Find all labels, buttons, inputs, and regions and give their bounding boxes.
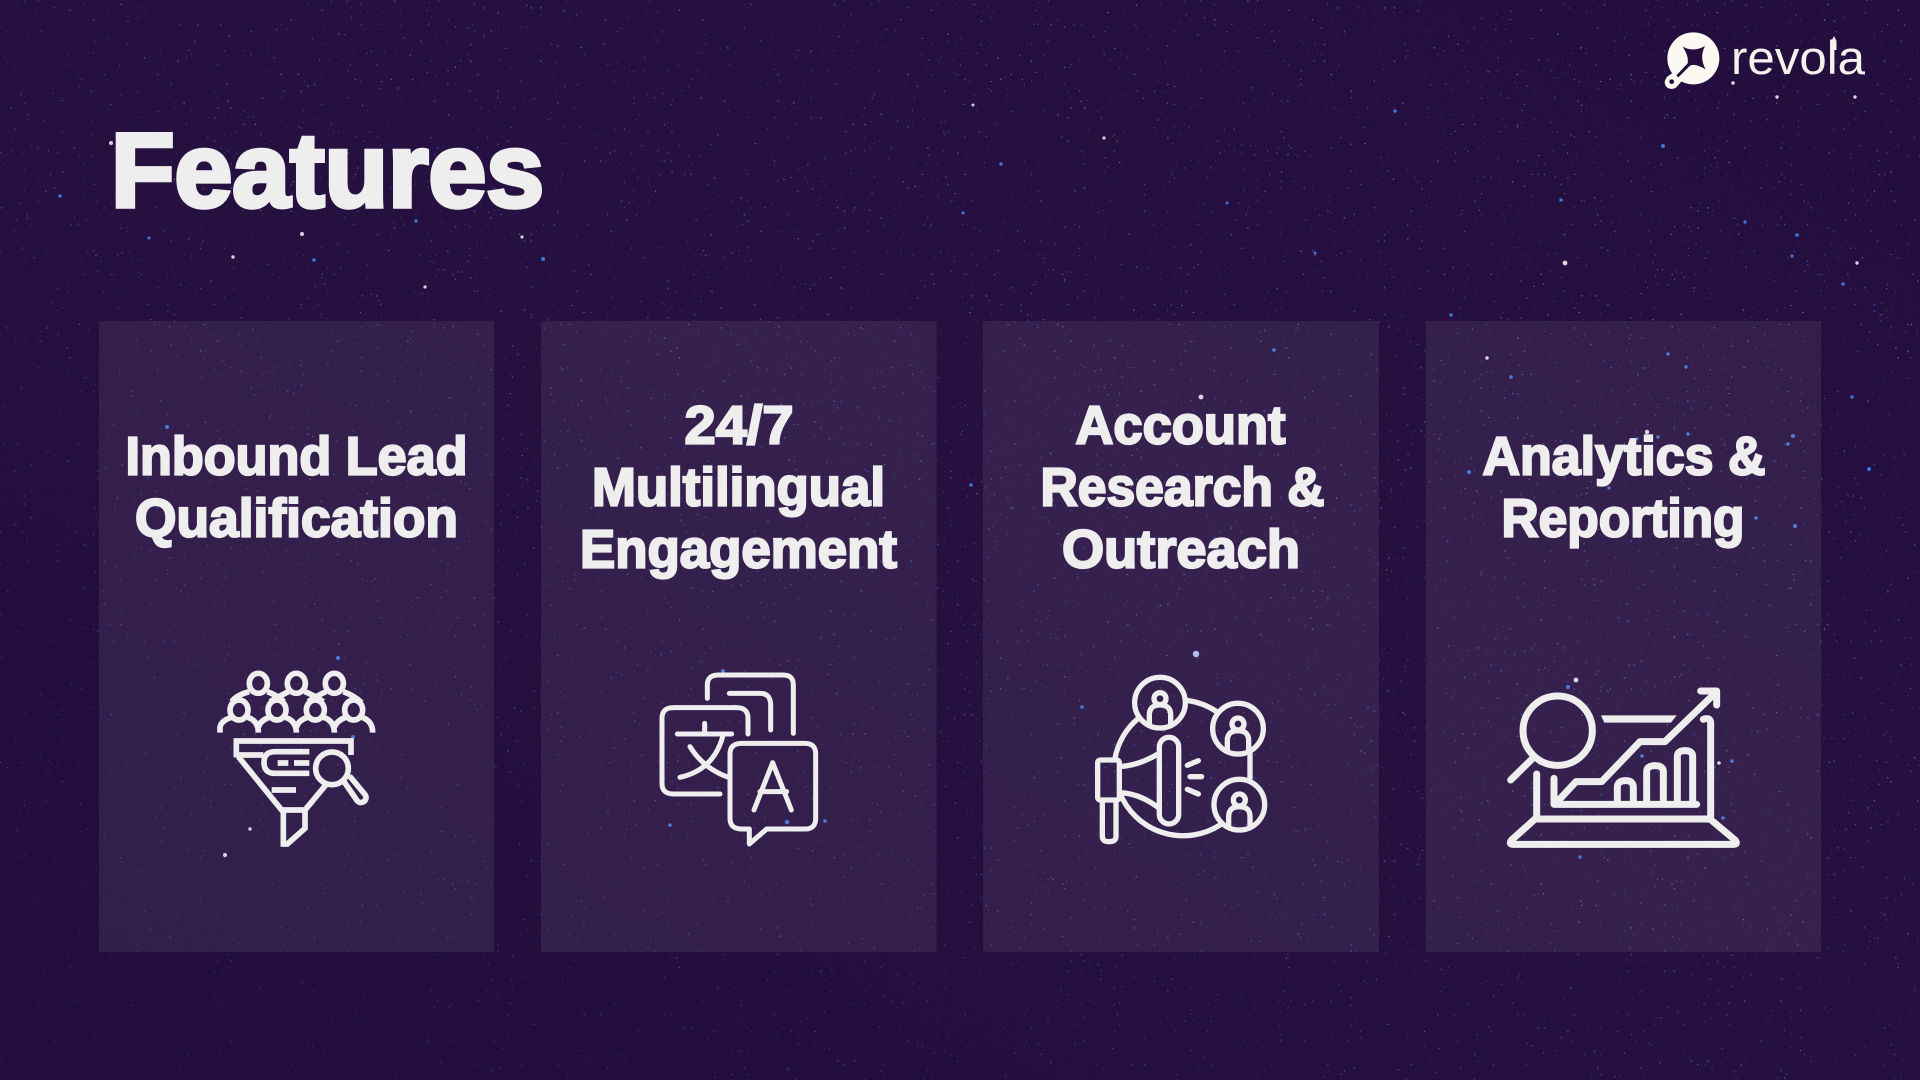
heading: 24/7 Multilingual Engagement: Multilingual <box>592 458 885 518</box>
icon: translation speech bubbles <box>662 675 816 844</box>
logo mark <box>1665 32 1719 89</box>
heading: Account Research & Outreach: Account <box>1076 396 1286 456</box>
heading: Analytics & Reporting: Analytics & <box>1482 428 1766 486</box>
heading: 24/7 Multilingual Engagement: Engagement <box>580 520 897 580</box>
panel: Analytics & Reporting <box>1426 321 1821 952</box>
heading: Account Research & Outreach: Research & <box>1040 458 1324 518</box>
icon: laptop analytics with magnifier <box>1510 691 1736 844</box>
title: Features <box>111 112 544 230</box>
heading: Analytics & Reporting: Reporting <box>1502 490 1744 548</box>
heading: Account Research & Outreach: Outreach <box>1062 520 1300 580</box>
heading: Account Research & Outreach <box>1040 396 1324 580</box>
heading: Inbound Lead Qualification: Inbound Lead <box>126 428 468 486</box>
heading: Analytics & Reporting <box>1482 428 1766 548</box>
heading: Inbound Lead Qualification: Qualification <box>135 490 458 548</box>
heading: Inbound Lead Qualification <box>126 428 468 548</box>
logo wordmark: revola <box>1731 31 1866 84</box>
logo: revola <box>1665 31 1866 89</box>
heading: 24/7 Multilingual Engagement: 24/7 <box>684 396 794 456</box>
heading: 24/7 Multilingual Engagement <box>580 396 897 580</box>
panel: Inbound Lead Qualification <box>99 321 494 952</box>
panel: Account Research & Outreach <box>983 321 1379 952</box>
icon: megaphone with audience <box>1098 677 1265 842</box>
panel: 24/7 Multilingual Engagement <box>541 321 936 952</box>
icon: funnel with people and magnifier <box>220 673 373 844</box>
